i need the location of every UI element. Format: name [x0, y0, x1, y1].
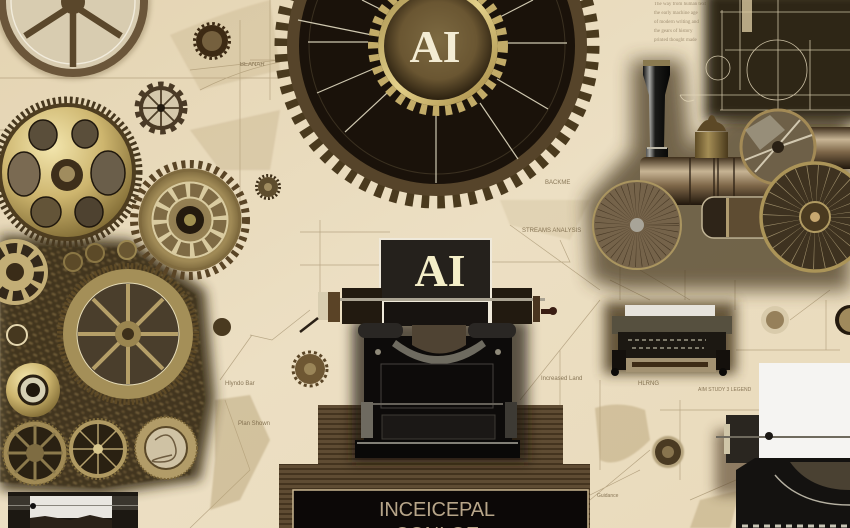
gear: large gold with holes	[0, 100, 139, 244]
gear: gold bearing	[6, 363, 60, 417]
paper with AI	[379, 238, 492, 324]
dome	[695, 115, 728, 158]
typewriter body	[355, 323, 520, 458]
map annotations: Increased Land	[541, 376, 582, 382]
map annotations: Hlyndo Bar	[225, 381, 255, 387]
faint text column, top right: printed thought made	[654, 38, 698, 43]
map annotations: Plan Shown	[238, 421, 270, 427]
boiler	[640, 157, 785, 205]
carriage	[300, 288, 557, 332]
typewriter shadow	[352, 320, 528, 462]
faint text column, top right: the early machine age	[654, 11, 699, 16]
dark machinery patch behind gears	[0, 235, 215, 495]
upper wheel	[741, 110, 815, 184]
wood platform, upper	[318, 405, 563, 465]
brass medallions	[652, 305, 850, 468]
plaque	[293, 490, 588, 528]
gear: small right of flower gear	[256, 176, 280, 198]
spokes	[298, 0, 567, 183]
chimney	[643, 60, 670, 157]
soft shadow	[585, 60, 850, 290]
gear: small spoked	[137, 84, 185, 132]
large typewriter bottom right	[715, 363, 850, 528]
map annotations: Guidance	[597, 493, 619, 499]
gear hub with AI: AI	[409, 21, 461, 72]
map annotations: BEANAR	[240, 62, 265, 68]
faint text column, top right: the gears of history	[654, 29, 693, 34]
faint text column, top right: The way from human text	[654, 2, 707, 7]
gears: small cogs in dark patch	[64, 241, 136, 271]
lower cylinder	[702, 197, 777, 238]
white paper	[759, 363, 850, 461]
gear: engraved medallion	[135, 417, 197, 479]
gear: small emblem	[7, 325, 27, 345]
gear: partial gold left	[0, 239, 48, 305]
small typewriter	[604, 302, 736, 376]
gear: lower left pair	[3, 419, 128, 485]
map annotations: AIM STUDY 3 LEGEND	[698, 387, 752, 393]
rear wheel	[761, 163, 850, 271]
gear: large spoked bronze	[60, 266, 196, 402]
map annotations	[225, 62, 752, 499]
faint text column, top right	[654, 2, 707, 43]
locomotive	[585, 0, 850, 290]
plaque: INCEICEPAL	[379, 499, 495, 521]
paper with AI: AI	[414, 245, 466, 296]
faint text column, top right: of modern writing and	[654, 20, 699, 25]
small brass knobs on map	[213, 318, 327, 386]
large central gear	[282, 0, 592, 201]
map annotations: STREAMS ANALYSIS	[522, 228, 581, 234]
map annotations: HLRNG	[638, 381, 659, 387]
rear boiler section	[790, 127, 850, 169]
map annotations: BACKME	[545, 180, 570, 186]
gear hub with AI	[373, 0, 503, 111]
gear: top-left spoked wheel	[0, 0, 151, 80]
blueprint panel	[680, 0, 850, 120]
gear: gold with flower pattern	[134, 164, 246, 276]
front wheel	[593, 181, 681, 269]
central typewriter with platform	[279, 238, 590, 528]
wood platform, lower	[279, 464, 590, 528]
machine body	[736, 458, 850, 528]
gear: small dark top	[194, 24, 230, 58]
typewriter: bottom left roller	[8, 492, 138, 528]
